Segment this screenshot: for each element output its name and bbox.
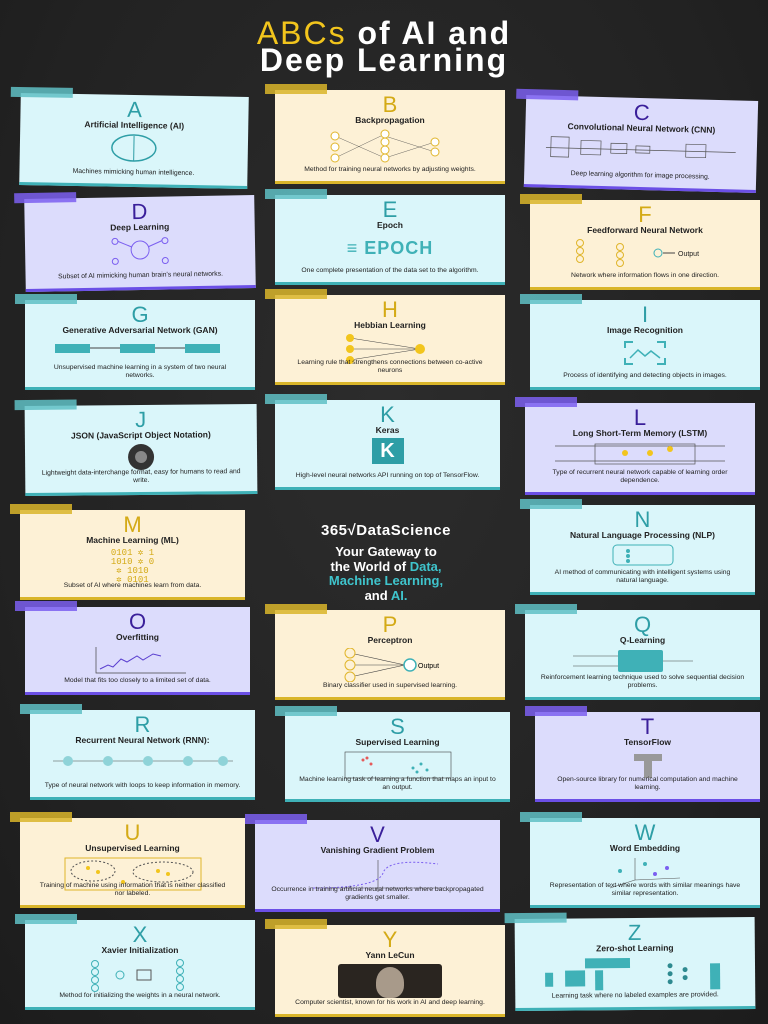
card L: Long Short-Term Memory (LSTM)	[573, 428, 707, 438]
card X: X	[133, 922, 147, 947]
brand callout: the World of Data,	[330, 558, 442, 574]
card V: Vanishing Gradient Problem	[321, 845, 434, 855]
card K: High-level neural networks API running on top of TensorFlow.	[296, 472, 479, 478]
card M: ✲ 0101	[116, 575, 149, 585]
card F: Output	[678, 251, 699, 258]
card W: W	[635, 820, 655, 845]
card R	[30, 710, 255, 800]
brand callout	[321, 522, 451, 602]
card G: Generative Adversarial Network (GAN)	[62, 325, 218, 335]
card Z: Learning task where no labeled examples are provided.	[552, 991, 719, 999]
card Q: Q-Learning	[620, 635, 665, 645]
card I: I	[642, 302, 648, 327]
card Z	[515, 917, 755, 1011]
card E: Epoch	[377, 220, 403, 230]
card J: Lightweight data-interchange format, easy for humans to read and write.	[42, 468, 241, 484]
card Y	[275, 925, 505, 1017]
card S: S	[390, 714, 405, 739]
card Q	[525, 610, 760, 700]
card I: Process of identifying and detecting objects in images.	[563, 372, 727, 378]
card T: Open-source library for numerical computation and machine learning.	[557, 776, 738, 790]
card U: Training of machine using information that is neither classified nor labeled.	[40, 882, 225, 896]
card A	[19, 93, 249, 189]
card J: J	[135, 407, 146, 432]
card C: Convolutional Neural Network (CNN)	[567, 121, 715, 135]
card T: TensorFlow	[624, 737, 671, 747]
card X: Xavier Initialization	[102, 945, 178, 955]
card B: Method for training neural networks by adjusting weights.	[304, 166, 476, 172]
card O: O	[129, 609, 146, 634]
card N: N	[635, 507, 650, 532]
card A: Machines mimicking human intelligence.	[73, 167, 194, 177]
card Z: Zero-shot Learning	[596, 943, 674, 953]
card K	[275, 400, 500, 490]
card M: 1010 ✲ 0	[111, 557, 154, 567]
card O: Overfitting	[116, 632, 159, 642]
card W: Word Embedding	[610, 843, 680, 853]
card T	[535, 712, 760, 802]
brand callout: Machine Learning,	[329, 573, 443, 588]
card M: ✲ 1010	[116, 566, 149, 576]
card A: Artificial Intelligence (AI)	[84, 119, 184, 131]
card W: Representation of text where words with similar meanings have similar representation.	[550, 882, 740, 896]
brand callout: and AI.	[365, 588, 407, 602]
card Y: Y	[383, 927, 397, 952]
card B	[275, 90, 505, 184]
brand callout: Your Gateway to	[335, 544, 437, 559]
card T: T	[641, 714, 654, 739]
card R: Type of neural network with loops to keep information in memory.	[45, 782, 240, 788]
card Q: Q	[634, 612, 651, 637]
card F: F	[638, 202, 652, 227]
card P	[275, 610, 505, 700]
card B: Backpropagation	[355, 115, 425, 125]
card K: K	[380, 440, 395, 462]
card F	[530, 200, 760, 290]
card M: Machine Learning (ML)	[86, 535, 179, 545]
card D: D	[131, 199, 148, 224]
card B: B	[383, 92, 397, 117]
card P: Binary classifier used in supervised learning.	[323, 682, 457, 688]
card X	[25, 920, 255, 1010]
card D: Deep Learning	[110, 221, 169, 233]
card D: Subset of AI mimicking human brain's neural networks.	[58, 270, 223, 280]
card O	[25, 607, 250, 695]
card J: JSON (JavaScript Object Notation)	[71, 429, 211, 441]
card P: Perceptron	[368, 635, 412, 645]
card U: U	[125, 820, 140, 845]
card S	[285, 712, 510, 802]
card J	[25, 404, 257, 496]
card H	[275, 295, 505, 385]
card H: Learning rule that strengthens connections between co-active neurons	[297, 359, 483, 374]
card N	[530, 505, 755, 595]
card G: Unsupervised machine learning in a system of two neural networks.	[54, 364, 226, 378]
card Z: Z	[628, 920, 642, 945]
card O: Model that fits too closely to a limited set of data.	[64, 676, 211, 684]
title	[257, 15, 511, 78]
card G: G	[131, 302, 149, 327]
card K: K	[380, 402, 395, 427]
card R: R	[135, 712, 150, 737]
card G	[25, 300, 255, 390]
title: ABCs of AI and	[257, 15, 511, 51]
card L	[525, 403, 755, 495]
card I: Image Recognition	[607, 325, 683, 335]
brand callout: 365√DataScience	[321, 522, 451, 539]
card E: E	[383, 197, 397, 222]
title: Deep Learning	[260, 42, 508, 78]
card U	[20, 818, 245, 908]
card Y: Computer scientist, known for his work in AI and deep learning.	[295, 998, 485, 1006]
card Y: Yann LeCun	[365, 950, 415, 960]
card M	[20, 510, 245, 600]
card M: 0101 ✲ 1	[111, 548, 154, 558]
card E: One complete presentation of the data set to the algorithm.	[301, 266, 479, 274]
card X: Method for initializing the weights in a neural network.	[59, 992, 221, 998]
card E	[275, 195, 505, 285]
card M: M	[123, 512, 142, 537]
card P: P	[383, 612, 397, 637]
card C	[524, 95, 758, 193]
card U: Unsupervised Learning	[85, 843, 180, 853]
card P: Output	[418, 663, 439, 670]
card C: Deep learning algorithm for image processing.	[571, 170, 710, 180]
card R: Recurrent Neural Network (RNN):	[75, 735, 210, 745]
card L: Type of recurrent neural network capable of learning order dependence.	[553, 469, 727, 484]
card F: Feedforward Neural Network	[587, 225, 703, 235]
card W	[530, 818, 760, 908]
card C: C	[634, 100, 650, 125]
card N: Natural Language Processing (NLP)	[570, 530, 715, 540]
card H: Hebbian Learning	[354, 320, 426, 330]
card I	[530, 300, 760, 390]
card S: Machine learning task of learning a function that maps an input to an output.	[299, 776, 496, 790]
card Q: Reinforcement learning technique used to solve sequential decision problems.	[541, 674, 744, 688]
card V: Occurrence in training artificial neural networks where backpropagated gradients get smaller.	[271, 886, 484, 900]
card M: Subset of AI where machines learn from data.	[64, 582, 201, 588]
card E: ≡ EPOCH	[347, 238, 433, 258]
card V	[255, 820, 500, 912]
card A: A	[127, 97, 142, 122]
card H: H	[382, 297, 398, 322]
card K: Keras	[376, 425, 399, 435]
card N: AI method of communicating with intelligent systems using natural language.	[555, 569, 730, 584]
card L: L	[634, 405, 646, 430]
card S: Supervised Learning	[355, 737, 440, 747]
card F: Network where information flows in one direction.	[571, 272, 719, 278]
card D	[24, 195, 256, 292]
card V: V	[370, 822, 385, 847]
